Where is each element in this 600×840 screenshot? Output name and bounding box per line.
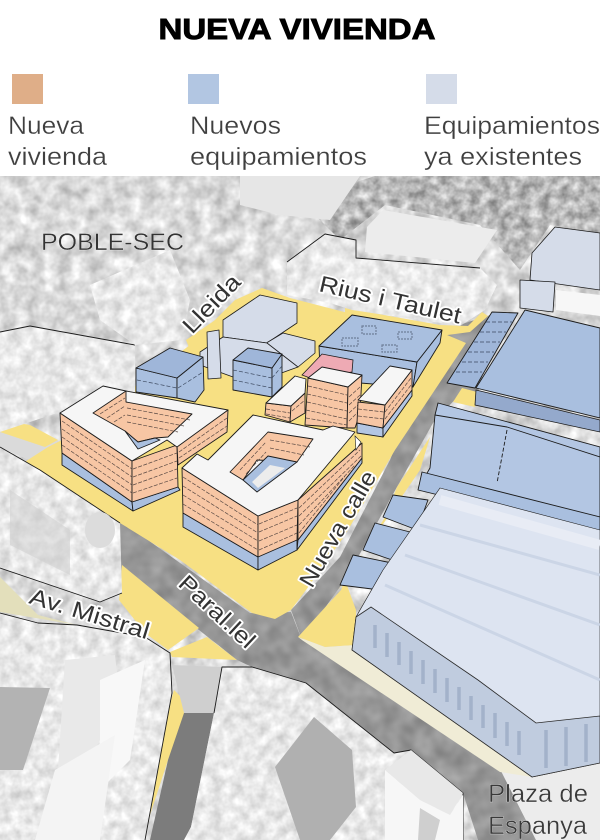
- yellow: lower street: [130, 690, 189, 840]
- tower: [207, 330, 221, 379]
- building: lower center block: [184, 667, 463, 840]
- new equipment: left blue block: [136, 348, 204, 402]
- legend item: equipamientos ya existentes: ya existentes: [424, 143, 582, 171]
- pink building: [302, 354, 353, 378]
- yellow strip: upper street: [345, 308, 488, 336]
- building: white hall top: [365, 210, 497, 263]
- yellow: Lleida edge: [186, 288, 268, 350]
- sidewalk: cream: [298, 637, 532, 777]
- courtyard A: [93, 391, 192, 442]
- yellow strip: far left: [0, 420, 58, 447]
- small blue wing 1: [383, 495, 428, 530]
- yellow: plaza front: [298, 580, 356, 647]
- yellow: strip along new street: [338, 437, 430, 590]
- new equipment: center blue block: [233, 348, 282, 397]
- avenue: pale strip: [0, 577, 77, 625]
- buildings: surrounding city: [0, 210, 497, 840]
- small blue wing 2: [363, 523, 410, 562]
- housing block B: [182, 415, 362, 570]
- road: Nueva calle: [291, 312, 500, 640]
- building: upper left second block: [90, 250, 190, 345]
- plaza surface: bottom right: [497, 763, 600, 840]
- blue hall middle: [418, 403, 600, 534]
- housing block J: [305, 367, 362, 428]
- label: Nueva calle: Nueva calle: [294, 466, 381, 592]
- label: Rius i Taulet: Rius i Taulet: [317, 271, 465, 329]
- building: lower left block: [0, 613, 172, 840]
- legend item: equipamientos ya existentes: Equipamientos: [424, 112, 600, 140]
- title: NUEVA VIVIENDA: [158, 14, 436, 46]
- yellow: plaza corner: [453, 388, 477, 407]
- plaza and road surface: [0, 288, 600, 840]
- legend: [8, 74, 600, 171]
- yellow: triangle Av. Mistral: [119, 565, 199, 650]
- building: upper left block: [0, 326, 135, 432]
- label: POBLE-SEC: POBLE-SEC: [41, 229, 184, 256]
- label: Lleida: Lleida: [177, 268, 246, 338]
- building: gray-blue existing back: [223, 295, 297, 343]
- aerial map: [0, 176, 600, 840]
- new housing blocks: [60, 366, 412, 570]
- housing block A: [60, 386, 228, 511]
- shadow street: [172, 665, 222, 713]
- buildings: central equipment complex: [136, 295, 442, 402]
- map base texture: [0, 176, 600, 840]
- legend item: nueva vivienda: vivienda: [8, 143, 107, 171]
- grid roof building: [447, 312, 518, 388]
- housing block K: [357, 366, 412, 437]
- yellow area: main block: [20, 288, 466, 619]
- road: Paral.lel: [120, 520, 536, 840]
- label: Plaza de Espanya: Plaza de: [488, 780, 588, 808]
- buildings: existing and new facilities (right): [340, 227, 600, 777]
- label: Plaza de Espanya: [488, 780, 588, 840]
- label: Plaza de Espanya: Espanya: [488, 812, 587, 840]
- existing hall: Plaza de Espanya pavilion: [352, 488, 600, 777]
- housing block I: [265, 376, 306, 422]
- building: Rius i Taulet block: [287, 234, 497, 326]
- legend item: nueva vivienda: Nueva: [8, 112, 84, 140]
- label: Av. Mistral: Av. Mistral: [27, 583, 153, 644]
- pavilion facade: [352, 607, 600, 777]
- legend item: nuevos equipamientos: equipamientos: [190, 143, 367, 171]
- small blue wing 3: [340, 555, 392, 590]
- street labels: [27, 229, 588, 840]
- legend item: equipamientos ya existentes: [424, 74, 600, 171]
- legend item: nuevos equipamientos: [188, 74, 367, 171]
- legend item: nuevos equipamientos: Nuevos: [190, 112, 281, 140]
- label: Paral.lel: Paral.lel: [174, 570, 261, 653]
- building: top right existing: [530, 227, 600, 290]
- legend item: nueva vivienda: [8, 74, 107, 171]
- yellow: triangle crossing: [170, 637, 237, 660]
- courtyard B: [230, 432, 313, 480]
- big blue hall: [475, 310, 600, 432]
- new equipment: large blue block: [319, 315, 442, 387]
- building: domed corner building: [0, 447, 122, 602]
